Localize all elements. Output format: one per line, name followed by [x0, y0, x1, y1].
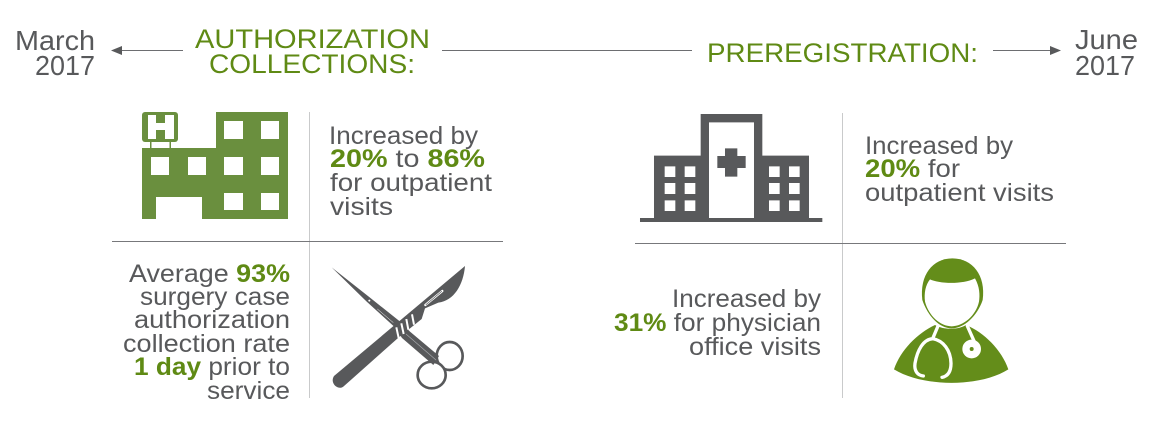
- text: physician preregistration: 31% for physician: [614, 309, 821, 337]
- text: outpatient authorization: [329, 122, 492, 221]
- text: outpatient preregistration: 20% for: [865, 155, 960, 183]
- text: surgery authorization: Average 93%: [129, 260, 290, 288]
- text: outpatient authorization: 20% to 86%: [330, 145, 485, 173]
- text: surgery authorization: collection rate: [123, 330, 290, 358]
- text: surgery authorization: service: [207, 377, 290, 405]
- icon: doctor: [894, 258, 1008, 383]
- text: outpatient preregistration: [865, 132, 1054, 207]
- text: outpatient authorization: for outpatient: [330, 169, 492, 197]
- heading: authorization collections: COLLECTIONS:: [209, 49, 415, 79]
- icon: green hospital: [142, 112, 288, 219]
- text: outpatient preregistration: outpatient visits: [865, 179, 1054, 207]
- start date: [15, 25, 95, 81]
- icon: gray hospital: [640, 114, 822, 222]
- text: physician preregistration: office visits: [689, 333, 821, 361]
- text: surgery authorization: [123, 260, 290, 405]
- text: outpatient authorization: Increased by: [329, 122, 479, 150]
- start date: 2017: [35, 50, 95, 81]
- timeline connector: [442, 50, 692, 52]
- arrow: toward June: [993, 46, 1061, 55]
- text: surgery authorization: surgery case: [140, 283, 290, 311]
- arrow: toward March: [111, 46, 183, 55]
- text: outpatient preregistration: Increased by: [865, 132, 1014, 160]
- heading: authorization collections: [195, 24, 430, 79]
- heading: preregistration: PREREGISTRATION:: [707, 38, 978, 68]
- heading: authorization collections: AUTHORIZATION: [195, 24, 430, 54]
- text: physician preregistration: Increased by: [672, 285, 822, 313]
- start date: March: [15, 25, 95, 56]
- text: surgery authorization: 1 day prior to: [134, 353, 290, 381]
- text: physician preregistration: [614, 285, 822, 361]
- icon: scalpel and scissors: [332, 266, 465, 388]
- end date: June: [1075, 24, 1138, 55]
- end date: [1075, 24, 1138, 81]
- text: surgery authorization: authorization: [134, 306, 290, 334]
- end date: 2017: [1075, 50, 1135, 81]
- text: outpatient authorization: visits: [330, 193, 393, 221]
